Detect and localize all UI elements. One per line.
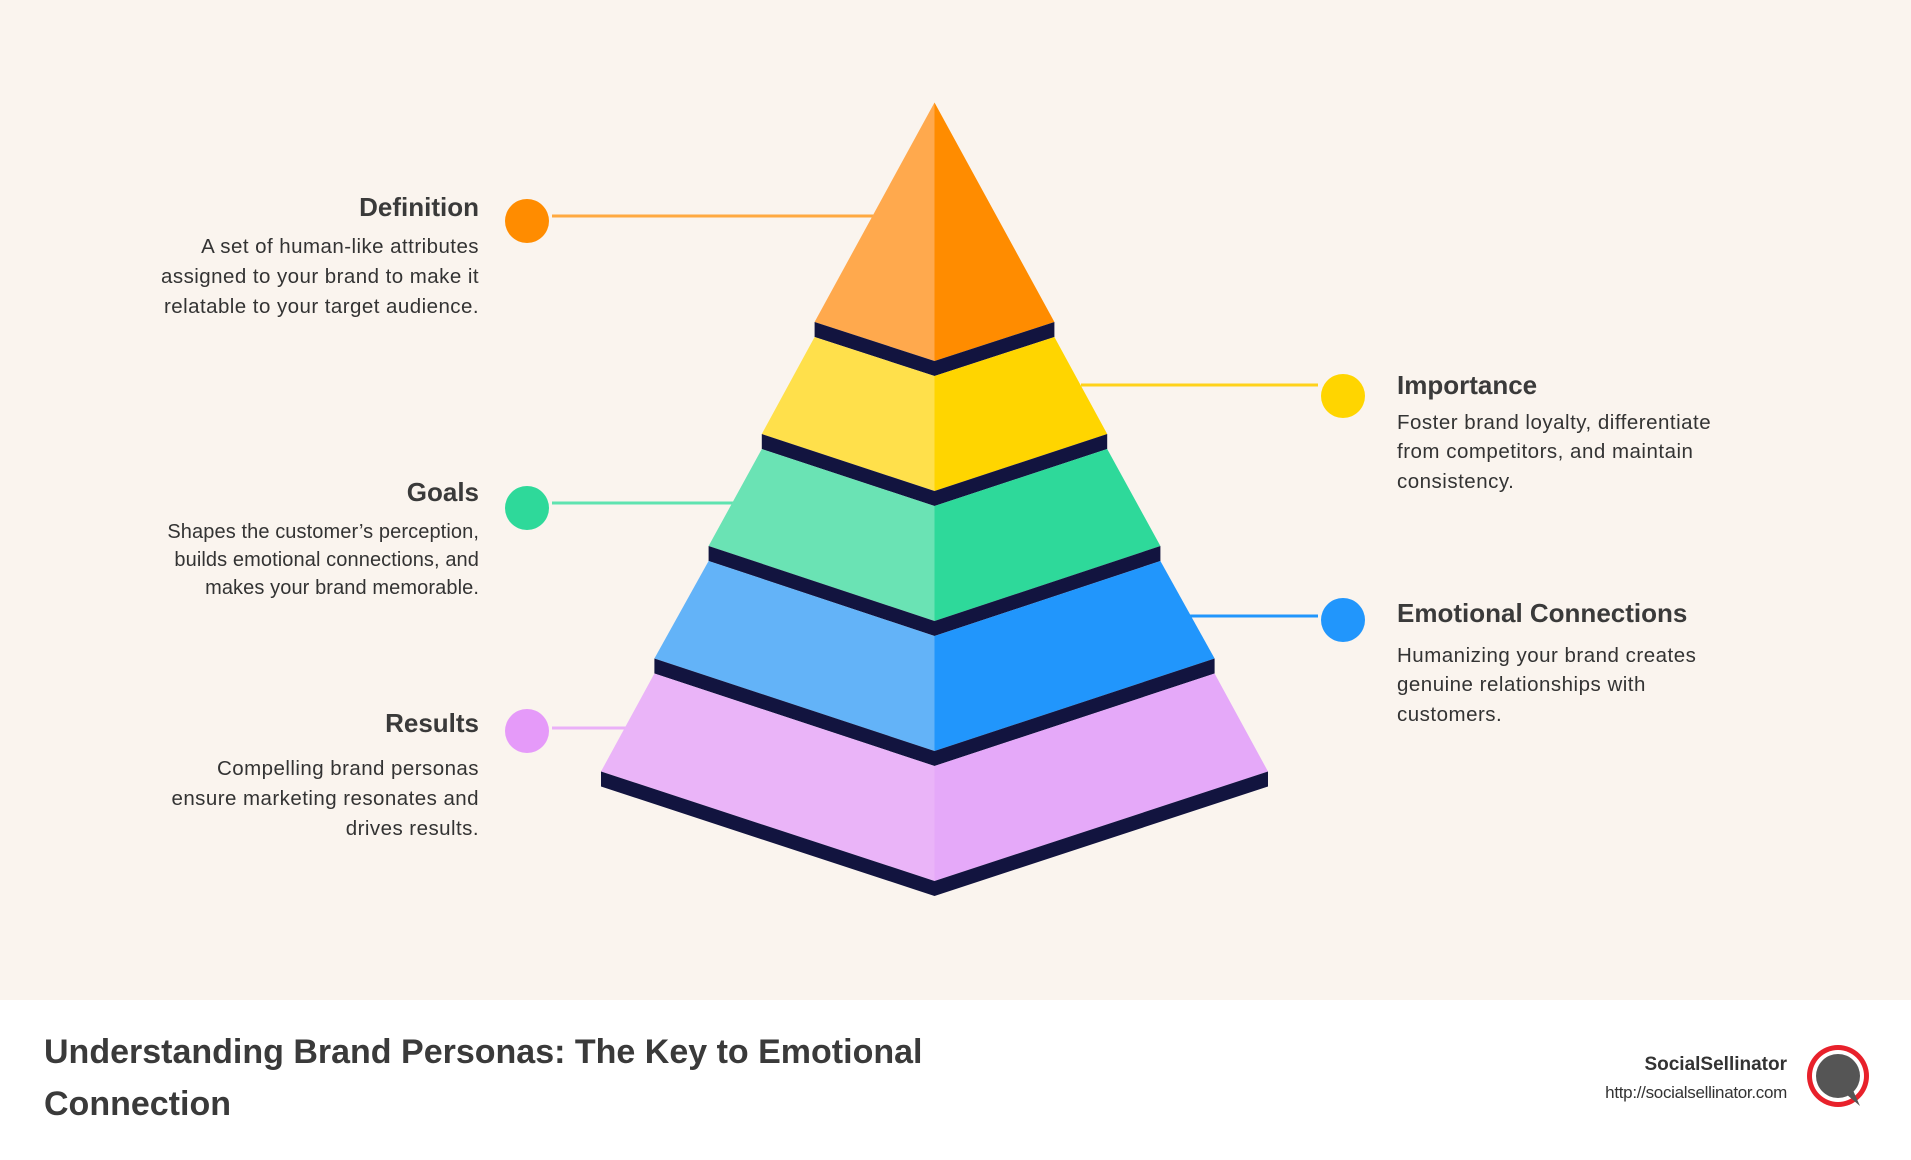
text: results: ensure marketing resonates and: [171, 787, 479, 810]
text: definition: assigned to your brand to make it: [161, 265, 479, 288]
pyramid: [601, 102, 1268, 896]
brand text: http://socialsellinator.com: [1605, 1083, 1787, 1102]
footer title: [44, 1033, 922, 1123]
brand text: [1605, 1054, 1788, 1102]
text: definition: [161, 192, 479, 318]
text: results: Compelling brand personas: [217, 757, 479, 780]
icon: logo: [1807, 1045, 1869, 1107]
text: importance: consistency.: [1397, 470, 1514, 493]
text: importance: from competitors, and maintain: [1397, 440, 1693, 463]
text: goals: Shapes the customer’s perception,: [167, 521, 479, 543]
text: importance: Importance: [1397, 370, 1537, 400]
footer title: Connection: [44, 1085, 231, 1123]
text: definition: A set of human-like attributes: [201, 235, 479, 258]
text: results: [171, 708, 479, 840]
footer: [0, 1000, 1911, 1160]
connector lines: [552, 216, 1318, 728]
text: emotional connections: genuine relationships with: [1397, 673, 1646, 696]
text: importance: Foster brand loyalty, differentiate: [1397, 411, 1711, 434]
text: importance: [1397, 370, 1711, 493]
text: emotional connections: [1397, 598, 1696, 726]
text: goals: Goals: [407, 477, 479, 507]
text: definition: relatable to your target audience.: [164, 295, 479, 318]
footer title: Understanding Brand Personas: The Key to Emotional: [44, 1033, 922, 1071]
text: goals: builds emotional connections, and: [174, 549, 479, 571]
brand text: SocialSellinator: [1644, 1054, 1788, 1075]
text: results: Results: [385, 708, 479, 738]
text: goals: [167, 477, 479, 599]
text: emotional connections: Humanizing your brand creates: [1397, 644, 1696, 667]
text: definition: Definition: [359, 192, 479, 222]
text: results: drives results.: [346, 817, 479, 840]
text: emotional connections: Emotional Connections: [1397, 598, 1687, 628]
text: emotional connections: customers.: [1397, 703, 1502, 726]
text: goals: makes your brand memorable.: [205, 577, 479, 599]
circles: [505, 199, 1365, 753]
